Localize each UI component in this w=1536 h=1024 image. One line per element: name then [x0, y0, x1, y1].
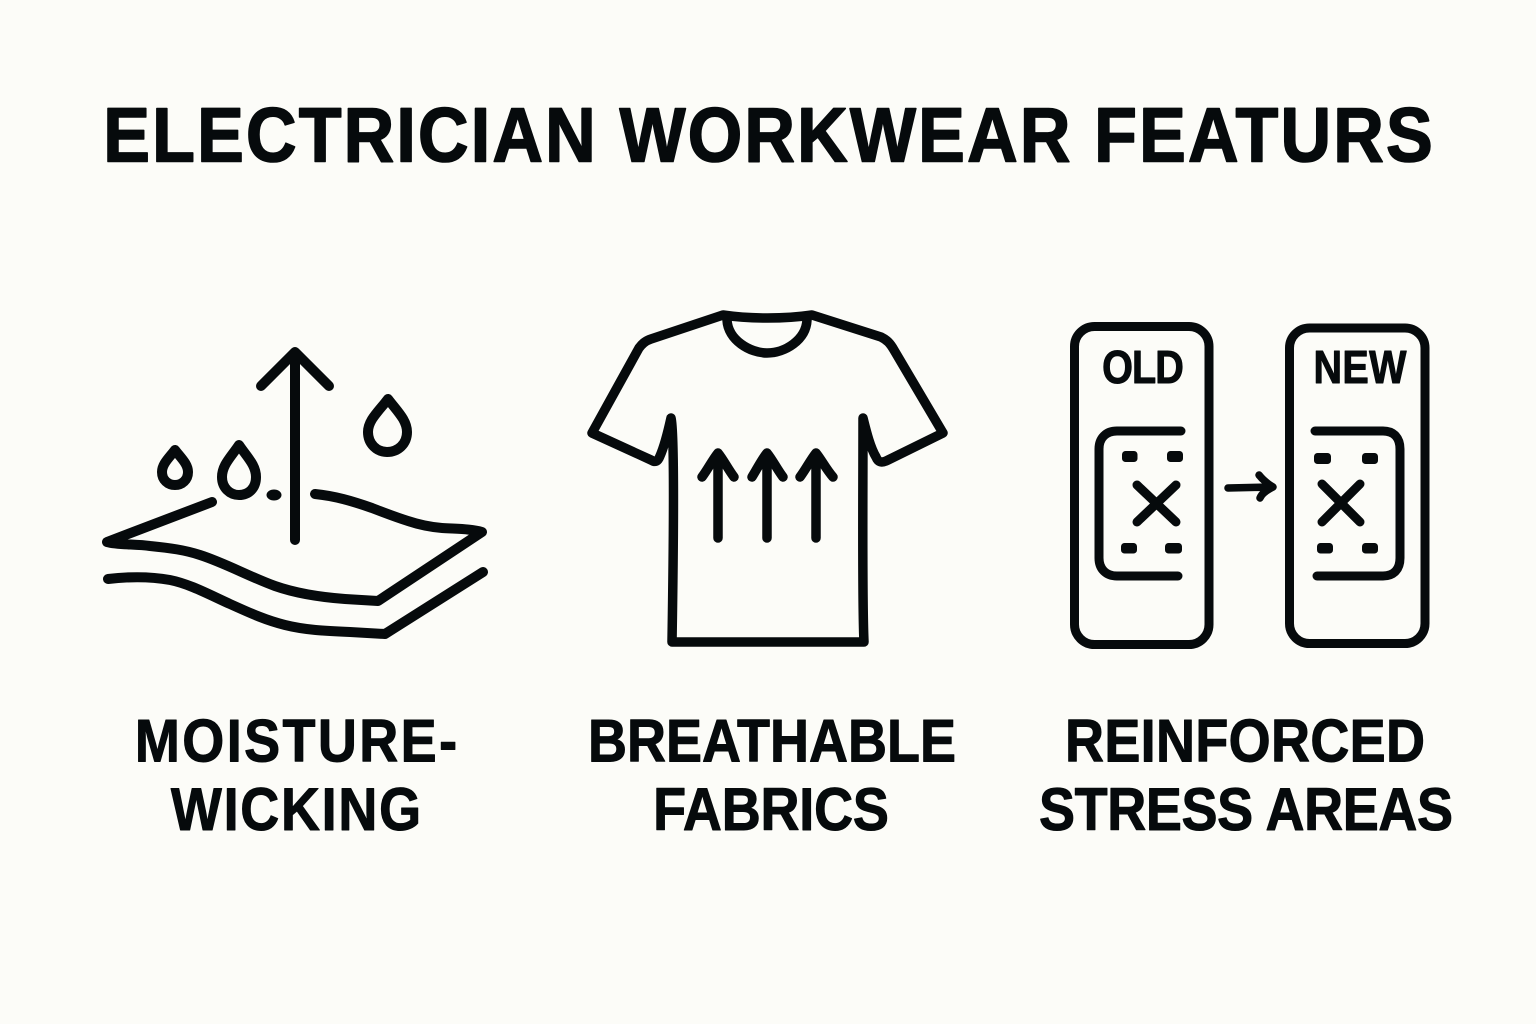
arrow: right airflow	[800, 453, 833, 538]
label: breathable fabrics	[588, 708, 956, 844]
icon: medium water drop	[222, 445, 256, 495]
label: moisture-wicking: MOISTURE-	[135, 708, 457, 775]
shirt outline	[592, 315, 943, 642]
moisture dot	[266, 490, 282, 500]
new patch	[1314, 431, 1400, 576]
new panel frame	[1290, 328, 1425, 644]
label: reinforced stress areas: STRESS AREAS	[1039, 776, 1453, 844]
icon: moisture-wicking fabric	[107, 352, 483, 634]
label: reinforced stress areas	[1039, 708, 1453, 844]
label: breathable fabrics: FABRICS	[653, 776, 889, 844]
old patch outline	[1099, 431, 1181, 576]
arrow: moisture rising	[261, 352, 329, 540]
icon: breathable t-shirt	[592, 315, 943, 642]
title: ELECTRICIAN WORKWEAR FEATURS	[103, 91, 1433, 178]
label: reinforced stress areas: REINFORCED	[1065, 708, 1425, 775]
fabric bottom layer	[108, 572, 483, 634]
fabric top layer	[107, 494, 482, 601]
label: moisture-wicking: WICKING	[171, 776, 421, 844]
label: breathable fabrics: BREATHABLE	[588, 708, 956, 775]
old stitch marks	[1121, 451, 1183, 554]
new patch outline	[1315, 431, 1400, 576]
new cross	[1322, 484, 1360, 522]
arrow: left airflow	[702, 453, 734, 538]
shirt collar	[727, 320, 807, 353]
old panel frame	[1074, 326, 1209, 644]
arrow: centre airflow	[752, 453, 783, 538]
icon: large water drop	[368, 399, 407, 452]
icon: new reinforced panel	[1290, 328, 1425, 644]
new stitch marks	[1314, 453, 1378, 554]
icon: old reinforced panel	[1074, 326, 1209, 644]
icon: small water drop	[162, 450, 188, 485]
label: moisture-wicking	[135, 708, 457, 844]
new label: NEW	[1314, 342, 1407, 394]
old patch	[1099, 431, 1183, 576]
old cross	[1137, 485, 1176, 522]
old label: OLD	[1102, 342, 1184, 394]
arrow: old to new	[1228, 475, 1273, 498]
